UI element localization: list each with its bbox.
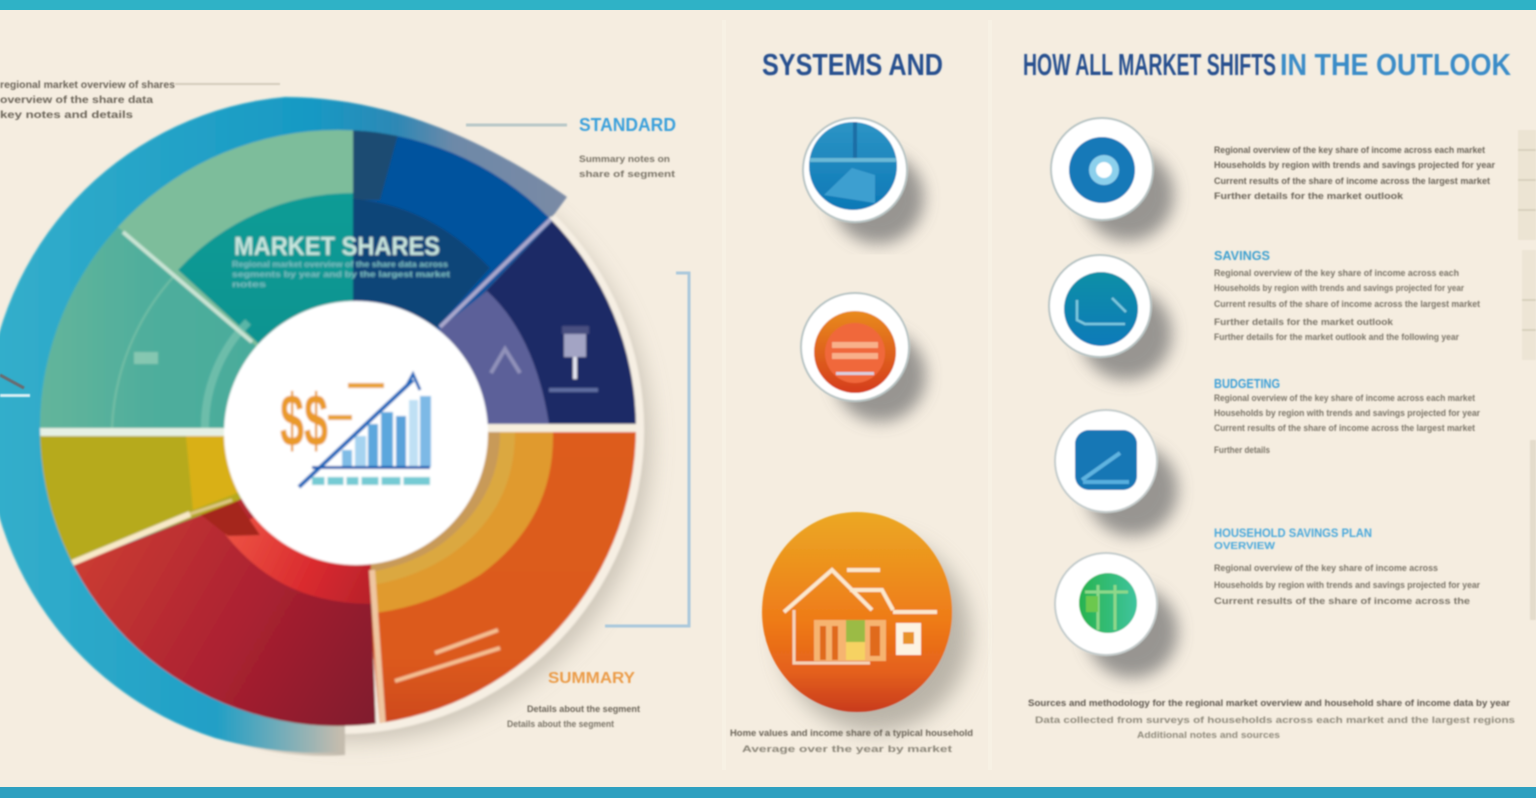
icon: right circle 3 [1055,410,1178,536]
inner yellow band [186,436,240,510]
orange bars [348,383,384,388]
icon: right circle 1 [1051,118,1174,241]
sector: orange [370,430,638,724]
bottom orange callout: SUMMARY [548,670,635,687]
sector: red [72,498,377,728]
amber core band [370,432,500,571]
text block 3: Further details [1214,445,1270,455]
inner arcs on green [205,322,248,428]
left callout: key notes and details [0,110,134,121]
footnote: Sources and methodology for the regional market overview and household share of income data by year [1028,698,1511,708]
center logo: dollar mark and rising chart [280,374,431,487]
inner blue band [352,199,490,328]
amber band [376,432,554,614]
text block 2: Further details for the market outlook and the following year [1214,332,1459,342]
text block 2: Further details for the market outlook [1214,317,1394,327]
top bar [0,0,1536,10]
chart bars [342,396,431,467]
chart teal caption [312,477,430,485]
top right callout [466,115,676,179]
top right callout: Summary notes on [579,154,670,164]
sublabel on teal sector: segments by year and by the largest market [232,270,450,279]
dark red patch [200,498,260,536]
text block 4 [1214,526,1480,606]
text block 2: Current results of the share of income across the largest market [1214,299,1480,309]
column separators [724,20,990,770]
sectors [38,128,638,728]
text block 1: Regional overview of the key share of income across each market [1214,145,1485,155]
bracket connector [605,273,689,626]
house walls [794,610,870,663]
bottom orange callout [507,670,640,729]
inner bright red band [226,516,372,605]
icon: middle blue circle [803,118,924,244]
bottom orange callout: Details about the segment [507,719,614,729]
inner navy band [440,291,549,424]
icon on navy sector [549,326,598,392]
dividers [123,232,252,342]
top right callout: STANDARD [579,115,676,135]
icon: house badge [762,512,970,732]
left callout [0,80,280,121]
text block 2: Regional overview of the key share of income across each [1214,268,1459,278]
house window [896,623,921,655]
sublabel on teal sector: Regional market overview of the share data across [232,260,449,269]
sublabel on teal sector: notes [232,280,267,289]
chart shadow [52,142,652,742]
ring fade [205,700,345,756]
icon: right circle 4 [1055,553,1178,678]
amber inner band [376,432,515,584]
text block 1: Further details for the market outlook [1214,191,1404,201]
sublabel on teal sector [232,260,450,289]
text block 3 [1214,376,1480,455]
caption under house: Home values and income share of a typical household [730,728,973,738]
text block 2: SAVINGS [1214,248,1270,263]
icon: middle orange circle [801,293,926,422]
sector: light green band [117,128,355,346]
text block 4: Current results of the share of income across the [1214,596,1470,606]
text block 3: Current results of the share of income across the largest market [1214,423,1475,433]
text block 3: BUDGETING [1214,376,1280,391]
chart arrow [299,380,413,487]
sector: teal [178,192,356,344]
chart outer highlight [36,126,644,734]
small glyphs on sectors [134,349,520,373]
sector: blue [364,136,553,332]
bottom bar [0,787,1536,798]
footnote: Data collected from surveys of households across each market and the largest regions [1035,715,1515,725]
text block 2 [1214,248,1480,342]
dollar text: $$ [280,379,328,462]
center circle [224,301,488,565]
blue dark corner [352,130,399,202]
text block 1 [1214,145,1495,201]
heading: middle column: SYSTEMS AND [762,47,943,82]
caption under house [730,728,973,754]
text block 1: Current results of the share of income across the largest market [1214,176,1490,186]
text block 3: Regional overview of the key share of income across each market [1214,393,1475,403]
icon: right circle 2 [1049,255,1172,380]
left callout: overview of the share data [0,95,154,106]
house green door [846,620,865,642]
text block 4: Regional overview of the key share of income across [1214,563,1438,573]
text block 4: Households by region with trends and savings projected for year [1214,580,1480,590]
footnote [1028,698,1515,740]
text block 4: OVERVIEW [1214,541,1276,552]
right edge decoration [1518,130,1536,620]
label on teal sector: MARKET SHARES [234,231,440,261]
bottom orange callout: Details about the segment [527,704,640,714]
chart base [312,466,430,469]
text block 2: Households by region with trends and savings projected for year [1214,283,1464,293]
sector: yellow [38,434,242,562]
top right callout: share of segment [579,169,675,179]
orange sector label [395,630,500,681]
caption under house: Average over the year by market [742,744,952,754]
sector: navy [480,220,638,426]
footnote: Additional notes and sources [1137,730,1280,740]
text block 3: Households by region with trends and savings projected for year [1214,408,1480,418]
sector: left green [38,227,256,429]
house roof [784,570,937,612]
donut chart [0,97,680,790]
text block 1: Households by region with trends and savings projected for year [1214,160,1495,170]
outer blue ring [0,97,567,753]
left ring marker [0,375,30,397]
text block 4: HOUSEHOLD SAVINGS PLAN [1214,526,1372,540]
left callout: regional market overview of shares [0,80,175,91]
heading: right column: HOW ALL MARKET SHIFTS [1023,47,1276,82]
